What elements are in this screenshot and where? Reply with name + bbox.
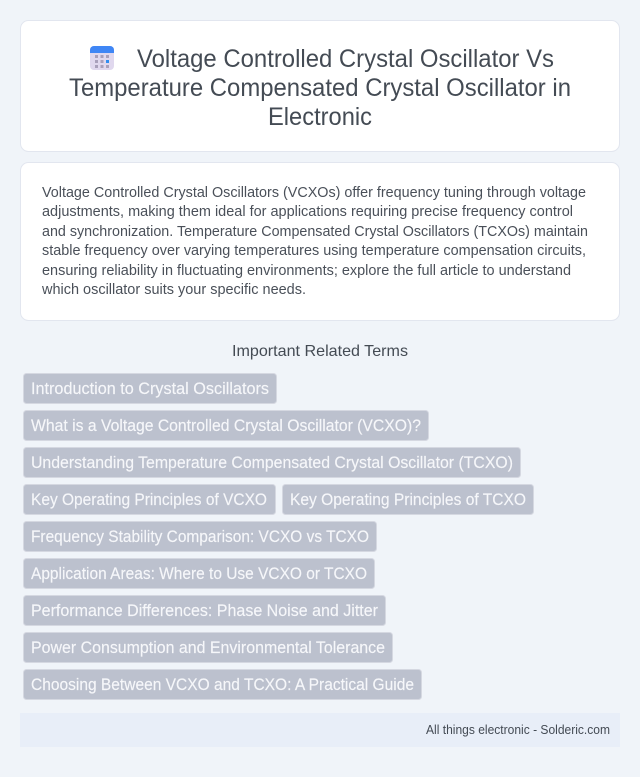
tag: understanding TCXO [24,448,520,478]
panel: title card [20,20,620,152]
tag: application areas [24,558,374,588]
text block: description: adjustments, making them ideal for applications requiring precise frequency control [42,204,573,220]
title: Electronic [268,103,372,131]
panel: description [20,162,620,320]
text block: description: Voltage Controlled Crystal Oscillators (VCXOs) offer frequency tuning through voltage [42,185,586,201]
tag: choosing guide [24,670,422,700]
title: Voltage Controlled Crystal Oscillator Vs [137,45,554,73]
tag: application areas: Application Areas: Where to Use VCXO or TCXO [31,564,367,583]
tag: principles of TCXO: Key Operating Principles of TCXO [290,490,526,509]
tag: what is VCXO: What is a Voltage Controlled Crystal Oscillator (VCXO)? [31,416,421,435]
text block: description: and synchronization. Temperature Compensated Crystal Oscillators (TCXOs) maintain [42,224,588,240]
footer: All things electronic - Solderic.com [426,723,610,737]
text block: description: ensuring reliability in fluctuating environments; explore the full article to understand [42,263,571,279]
tag: principles of TCXO [282,484,534,514]
tag: what is VCXO [24,410,428,440]
title: Temperature Compensated Crystal Oscillator in [69,74,571,102]
title [69,45,571,131]
text block: description [41,185,588,298]
tag: principles of VCXO: Key Operating Principles of VCXO [31,490,267,509]
text block: description: which oscillator suits your specific needs. [41,282,306,298]
tag: performance differences: Performance Differences: Phase Noise and Jitter [31,601,378,620]
tag: introduction: Introduction to Crystal Oscillators [31,379,269,398]
tag: principles of VCXO [24,484,276,514]
footer [20,713,620,747]
text block: description: stable frequency over varying temperatures using temperature compensation circuits, [42,243,586,259]
tag: introduction [24,374,276,404]
tag: stability comparison [24,522,376,552]
heading: important related terms: Important Related Terms [232,343,408,360]
tag: stability comparison: Frequency Stability Comparison: VCXO vs TCXO [31,527,369,546]
tag: understanding TCXO: Understanding Temperature Compensated Crystal Oscillator (TCXO) [31,453,513,472]
icon: calendar [90,46,114,70]
tag: choosing guide: Choosing Between VCXO and TCXO: A Practical Guide [31,675,414,694]
tag: power consumption [24,632,392,662]
tag: performance differences [24,596,386,626]
tag: power consumption: Power Consumption and Environmental Tolerance [31,638,385,657]
